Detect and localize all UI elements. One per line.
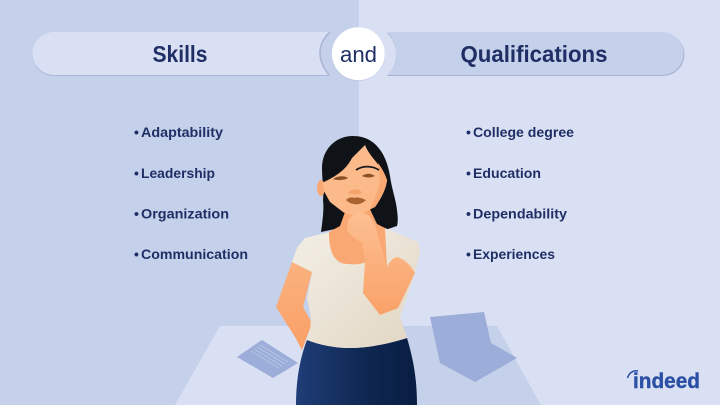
- ear: [317, 180, 325, 196]
- and badge: and: [340, 42, 377, 67]
- list: qualifications: College degree: [473, 124, 574, 140]
- neck and chest: [329, 205, 387, 267]
- face: [322, 145, 387, 215]
- hair: [321, 136, 398, 232]
- indeed logo: indeed: [633, 370, 700, 393]
- list: skills: [134, 124, 248, 262]
- skills pill: [32, 32, 330, 76]
- list: skills: •: [134, 246, 139, 262]
- list: qualifications: Dependability: [473, 206, 567, 222]
- list: skills: Leadership: [141, 165, 215, 181]
- left arm: [276, 262, 312, 350]
- eyes: [333, 174, 375, 180]
- list: qualifications: •: [466, 206, 471, 222]
- icon: clipboard: [237, 340, 298, 378]
- list: qualifications: •: [466, 124, 471, 140]
- skills pill: Skills: [152, 41, 208, 67]
- shirt: [292, 228, 420, 348]
- list: qualifications: [466, 124, 574, 262]
- desk: [175, 326, 541, 405]
- mouth: [346, 197, 366, 204]
- list: qualifications: •: [466, 165, 471, 181]
- icon: laptop: [430, 312, 517, 382]
- cheek shadow: [370, 163, 387, 209]
- qualifications pill: [387, 32, 684, 76]
- right eyebrow: [356, 167, 379, 170]
- nose: [348, 189, 362, 194]
- skirt: [296, 338, 417, 405]
- qualifications pill: Qualifications: [460, 41, 608, 67]
- left background panel: [0, 0, 359, 405]
- right background panel: [359, 0, 720, 405]
- list: skills: •: [134, 124, 139, 140]
- list: skills: Adaptability: [141, 124, 223, 140]
- person thinking: [276, 136, 420, 405]
- list: skills: •: [134, 206, 139, 222]
- list: skills: •: [134, 165, 139, 181]
- and badge: [332, 27, 385, 81]
- list: skills: Communication: [141, 246, 248, 262]
- list: qualifications: •: [466, 246, 471, 262]
- list: skills: Organization: [141, 206, 229, 222]
- hand and raised arm: [347, 213, 415, 315]
- list: qualifications: Education: [473, 165, 541, 181]
- header: skills and qualifications: [32, 27, 684, 81]
- list: qualifications: Experiences: [473, 246, 555, 262]
